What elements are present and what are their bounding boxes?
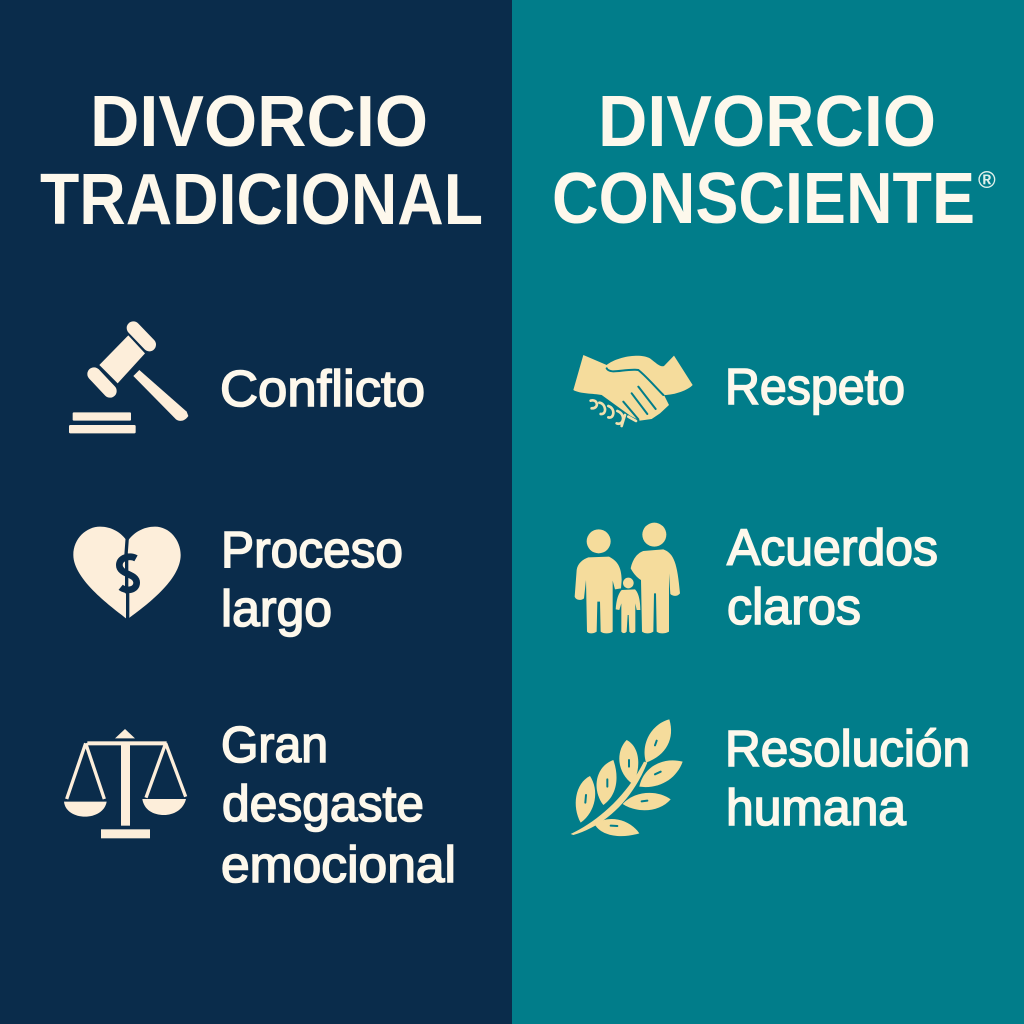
heading: divorcio consciente: DIVORCIO — [598, 82, 936, 162]
heading: divorcio consciente: CONSCIENTE — [552, 159, 975, 239]
icon: family — [575, 523, 680, 633]
icon: gavel — [69, 328, 188, 433]
label: resolución humana: Resolución — [725, 720, 970, 777]
label: gran desgaste emocional: emocional — [221, 836, 456, 893]
heading: divorcio consciente: ® — [978, 167, 996, 194]
label: proceso largo — [221, 521, 403, 637]
heading: divorcio tradicional — [40, 82, 483, 240]
label: respeto: Respeto — [725, 358, 905, 415]
label: gran desgaste emocional: desgaste — [222, 775, 424, 832]
heading: divorcio tradicional: DIVORCIO — [90, 82, 428, 162]
label: gran desgaste emocional: Gran — [221, 716, 328, 773]
icon: olive branch — [571, 719, 683, 836]
label: proceso largo: Proceso — [221, 521, 403, 578]
panel: divorcio consciente — [512, 0, 1024, 1024]
label: acuerdos claros: claros — [727, 578, 861, 635]
icon: handshake — [573, 355, 693, 426]
label: acuerdos claros: Acuerdos — [727, 519, 938, 576]
heading: divorcio tradicional: TRADICIONAL — [40, 160, 483, 240]
label: resolución humana — [725, 720, 970, 836]
label: resolución humana: humana — [726, 779, 907, 836]
label: proceso largo: largo — [221, 580, 332, 637]
icon: broken heart with dollar — [73, 527, 181, 620]
label: acuerdos claros — [727, 519, 938, 635]
panel: divorcio tradicional — [0, 0, 512, 1024]
icon: scales — [64, 729, 186, 838]
label: conflicto: Conflicto — [220, 360, 425, 417]
label: gran desgaste emocional — [221, 716, 456, 893]
heading: divorcio consciente — [552, 82, 996, 239]
